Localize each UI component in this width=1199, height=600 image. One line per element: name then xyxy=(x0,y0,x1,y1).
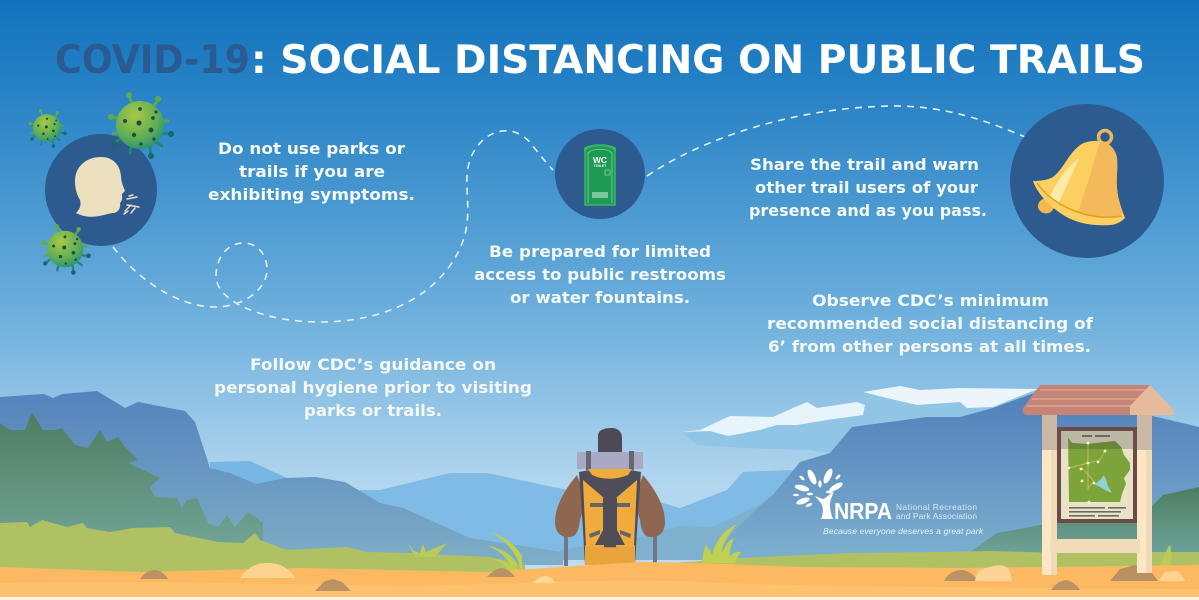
text: do not use parks: exhibiting symptoms. xyxy=(208,186,415,204)
tree mark xyxy=(793,467,844,519)
rocks xyxy=(140,563,1186,591)
landscape background hills xyxy=(0,391,830,565)
text: share the trail xyxy=(749,156,987,220)
icon: portable toilet: WC xyxy=(593,155,607,165)
text: follow CDC hygiene: parks or trails. xyxy=(304,402,442,420)
map board xyxy=(1057,427,1137,523)
ground xyxy=(0,562,1199,600)
text: social distancing: 6’ from other persons at all times. xyxy=(768,338,1091,356)
clouds xyxy=(682,386,1038,453)
text: do not use parks: Do not use parks or xyxy=(218,140,405,158)
text: social distancing: Observe CDC’s minimum xyxy=(812,292,1049,310)
text: do not use parks xyxy=(208,140,415,204)
icon: bell xyxy=(1010,104,1164,258)
NRPA logo: and Park Association xyxy=(896,511,977,521)
roof xyxy=(1023,385,1174,415)
right mountain xyxy=(700,392,1199,565)
text: social distancing: recommended social distancing of xyxy=(767,315,1093,333)
text: follow CDC hygiene: Follow CDC’s guidance on xyxy=(250,356,496,374)
NRPA logo xyxy=(793,467,984,536)
text: do not use parks: trails if you are xyxy=(239,163,385,181)
wordmark: NRPA xyxy=(834,498,892,524)
grass xyxy=(0,520,1199,575)
NRPA logo: Because everyone deserves a great park xyxy=(823,526,984,536)
icon: coughing head and viruses xyxy=(28,92,174,275)
dashed trail line xyxy=(113,106,1025,322)
text: restrooms xyxy=(474,243,726,307)
kiosk sign with map xyxy=(1023,385,1174,575)
text: share the trail: presence and as you pass. xyxy=(749,202,987,220)
text: restrooms: or water fountains. xyxy=(510,289,690,307)
text: follow CDC hygiene xyxy=(214,356,532,420)
title: : SOCIAL DISTANCING ON PUBLIC TRAILS xyxy=(251,38,1145,83)
text: share the trail: other trail users of your xyxy=(755,179,978,197)
icon: portable toilet xyxy=(555,129,645,219)
text: share the trail: Share the trail and warn xyxy=(750,156,979,174)
NRPA logo: National Recreation xyxy=(896,502,977,512)
text: restrooms: Be prepared for limited xyxy=(489,243,711,261)
text: social distancing xyxy=(767,292,1093,356)
forest silhouettes xyxy=(0,412,1199,560)
text: follow CDC hygiene: personal hygiene prior to visiting xyxy=(214,379,532,397)
text: restrooms: access to public restrooms xyxy=(474,266,726,284)
hiker xyxy=(555,428,665,566)
icon: portable toilet: TOILET xyxy=(594,164,607,168)
title: COVID-19 xyxy=(55,38,250,83)
